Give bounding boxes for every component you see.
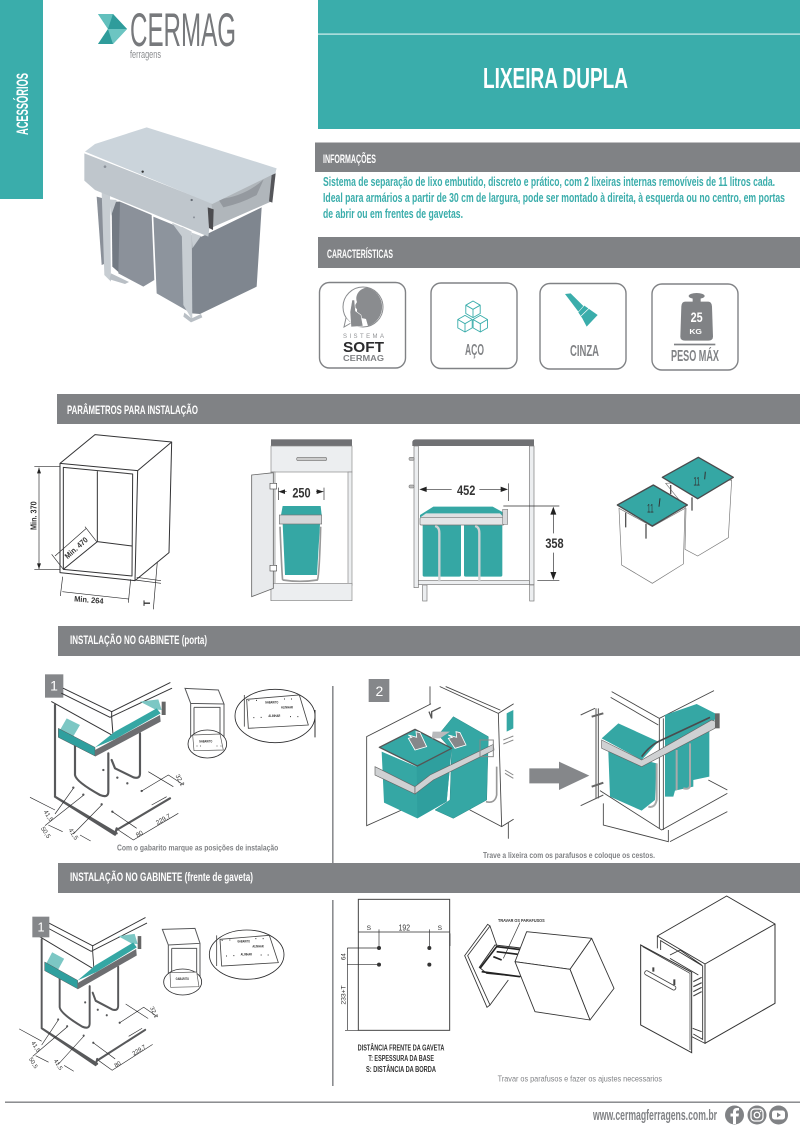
- legend: drawer template notes: T: ESPESSURA DA BASE: [368, 1054, 434, 1063]
- inset: template detail: [209, 930, 284, 979]
- heading bar: instalação no gabinete porta: [58, 626, 800, 656]
- assembled view: [581, 691, 727, 842]
- card: peso máximo: [652, 284, 738, 370]
- step 2: insert baskets: [367, 679, 727, 860]
- diagram: drawer front template: S: [367, 925, 372, 932]
- diagram: drawer front template: 233+T: [340, 985, 347, 1005]
- diagram: door mount width 250: [252, 439, 352, 601]
- inset: template detail: ALINHAR: [252, 944, 264, 948]
- frame illustration: 41,5: [52, 1058, 63, 1072]
- card: sistema soft: SOFT: [343, 339, 384, 356]
- frame illustration: 32,1: [148, 1006, 159, 1019]
- card: aço: [431, 283, 517, 368]
- step 1: drawer front mount: [19, 917, 284, 1072]
- legend: drawer template notes: S: DISTÂNCIA DA BORDA: [366, 1065, 436, 1074]
- bin: front: 11: [647, 502, 654, 516]
- diagram: cabinet minimum dimensions: Min. 370: [29, 501, 38, 530]
- step 1: door mount: Com o gabarito marque as posições de instalação: [117, 843, 278, 853]
- frame illustration: [19, 918, 159, 1072]
- icon: paint brush: [565, 293, 598, 327]
- diagram: two 11 litre bins: [617, 457, 733, 583]
- card: sistema soft: [320, 282, 406, 368]
- heading bar: parâmetros para instalação: PARÂMETROS PARA INSTALAÇÃO: [67, 402, 198, 417]
- text block: informações: de abrir ou em frentes de gavetas.: [323, 206, 463, 221]
- diagram: fixing screws on drawer: [465, 918, 662, 1084]
- step 1: door mount: 80: [135, 829, 145, 839]
- inset: cabinet with template: GABARITO: [176, 976, 189, 981]
- icon: cubes: [458, 301, 488, 332]
- title banner: LIXEIRA DUPLA: [483, 63, 628, 95]
- icon: silence profile: [343, 287, 383, 327]
- card: aço: AÇO: [465, 342, 484, 359]
- frame illustration: 50,5: [27, 1057, 38, 1071]
- bin: rear: 11: [693, 474, 700, 488]
- heading bar: informações: INFORMAÇÕES: [323, 153, 376, 166]
- heading bar: características: CARACTERÍSTICAS: [327, 248, 393, 261]
- icon: youtube: [769, 1106, 788, 1124]
- icon: facebook: [725, 1106, 744, 1124]
- diagram: width 452 and height 358: 452: [457, 482, 475, 498]
- card: cinza: CINZA: [570, 343, 599, 360]
- badge 1: 1: [50, 678, 58, 694]
- legend: drawer template notes: [358, 1043, 444, 1074]
- logo: cermag: ferragens: [130, 49, 161, 61]
- inset: cabinet with template: GABARITO: [199, 738, 212, 743]
- inset: template detail: GABARITO: [237, 939, 250, 943]
- diagram: drawer front template: 192: [399, 924, 410, 933]
- heading bar: características: [318, 237, 800, 268]
- icon: 25 kg weight: [674, 293, 715, 345]
- icon: instagram: [748, 1106, 766, 1124]
- inset: cabinet with template: [185, 688, 227, 758]
- step 1: door mount: 229,7: [155, 813, 172, 827]
- arrow: next step: [529, 762, 589, 790]
- step 1: door mount: 50,5: [39, 826, 52, 840]
- diagram: finished drawer cabinet: [641, 896, 775, 1053]
- badge 1: [45, 674, 63, 698]
- inset: cabinet with template: [162, 928, 202, 995]
- diagram: fixing screws on drawer: Travar os parafusos e fazer os ajustes necessarios: [498, 1074, 662, 1084]
- inset: template detail: ALINHAR: [281, 706, 293, 710]
- badge 2: 2: [375, 683, 383, 699]
- diagram: door mount width 250: 250: [292, 484, 311, 500]
- diagram: drawer front template: 64: [340, 953, 347, 960]
- diagram: cabinet minimum dimensions: Min. 470: [63, 535, 90, 561]
- card: peso máximo: PESO MÁX: [671, 346, 719, 365]
- card: sistema soft: SISTEMA: [343, 334, 384, 340]
- diagram: fixing screws on drawer: TRAVAR OS PARAFUSOS: [498, 918, 545, 924]
- card: sistema soft: CERMAG: [343, 353, 384, 363]
- icon: 25 kg weight: KG: [689, 327, 702, 336]
- heading bar: instalação no gabinete frente de gaveta: [58, 863, 800, 893]
- frame illustration: 41,5: [30, 1041, 41, 1055]
- product photo: double bin: [84, 127, 277, 322]
- diagram: cabinet minimum dimensions: T: [142, 600, 152, 606]
- diagram: drawer front template: [340, 899, 450, 1074]
- logo: cermag: CERMAG: [130, 3, 236, 56]
- diagram: width 452 and height 358: 358: [545, 535, 564, 551]
- badge 2: [369, 679, 389, 702]
- card: cinza: [540, 284, 626, 369]
- legend: drawer template notes: DISTÂNCIA FRENTE DA GAVETA: [358, 1043, 444, 1052]
- divider: [332, 686, 334, 863]
- frame illustration: 80: [114, 1060, 123, 1069]
- badge 1: 1: [37, 921, 45, 935]
- step 1: door mount: [30, 674, 315, 853]
- logo: cermag: [98, 3, 236, 61]
- footer: [5, 1102, 800, 1124]
- step 1: door mount: 41,5: [42, 809, 54, 823]
- side tab: acessórios: ACESSÓRIOS: [13, 73, 32, 135]
- rear basket: [435, 717, 497, 818]
- title banner: [318, 0, 800, 129]
- diagram: cabinet minimum dimensions: Min. 264: [74, 594, 104, 606]
- text block: informações: [323, 174, 785, 221]
- divider: [332, 900, 334, 1086]
- diagram: width 452 and height 358: [409, 439, 564, 601]
- inset: template detail: GABARITO: [265, 700, 278, 704]
- inset: template detail: ALINHAR: [241, 953, 252, 957]
- badge 1: [32, 917, 49, 937]
- icon: 25 kg weight: 25: [691, 309, 703, 325]
- inset: template detail: ALINHAR: [268, 714, 281, 718]
- heading bar: parâmetros para instalação: [57, 394, 800, 424]
- inset: template detail: [235, 689, 315, 743]
- step 2: insert baskets: Trave a lixeira com os parafusos e coloque os cestos.: [483, 850, 655, 860]
- front basket: [379, 729, 452, 818]
- heading bar: instalação no gabinete frente de gaveta: INSTALAÇÃO NO GABINETE (frente de gaveta): [70, 869, 253, 884]
- frame illustration: 229,7: [132, 1044, 147, 1058]
- step 1: door mount: 32,1: [174, 773, 186, 788]
- step 1: door mount: 41,5: [67, 827, 79, 842]
- diagram: drawer front template: S: [438, 925, 443, 932]
- heading bar: informações: [315, 142, 800, 172]
- heading bar: instalação no gabinete porta: INSTALAÇÃO NO GABINETE (porta): [70, 632, 207, 647]
- side tab: acessórios: [0, 0, 43, 199]
- diagram: cabinet minimum dimensions: [29, 435, 172, 609]
